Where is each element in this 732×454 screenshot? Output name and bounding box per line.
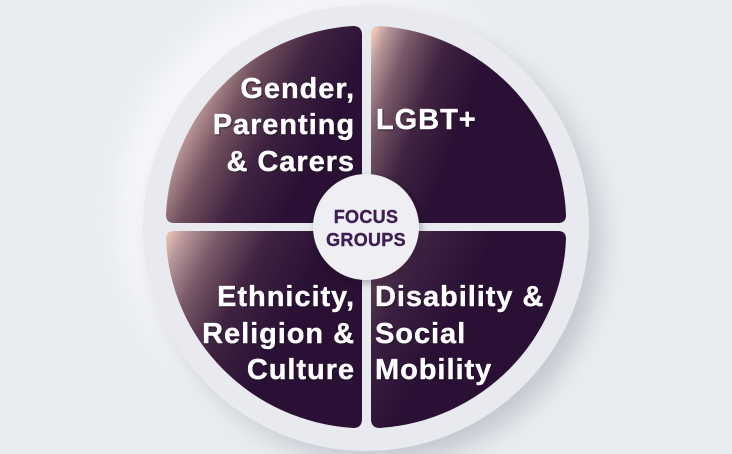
quadrant: Gender, Parenting & Carers (166, 26, 362, 223)
center circle: Focus Groups: GROUPS (326, 230, 406, 250)
label: Ethnicity, Religion & Culture: Culture (247, 354, 355, 386)
label: Gender, Parenting & Carers: Gender, (240, 73, 355, 105)
center circle: Focus Groups (313, 174, 419, 280)
quadrant: Ethnicity, Religion & Culture (166, 231, 362, 428)
label: Disability & Social Mobility: Mobility (375, 354, 492, 386)
label: Disability & Social Mobility: Disability & (375, 281, 544, 313)
quadrant: LGBT+ (371, 26, 566, 223)
quadrant: Disability & Social Mobility (371, 231, 566, 428)
label: Disability & Social Mobility: Social (375, 318, 466, 350)
soft highlight (119, 0, 571, 436)
label: LGBT+: LGBT+ (376, 104, 477, 136)
label: Gender, Parenting & Carers: & Carers (226, 146, 355, 178)
label: Ethnicity, Religion & Culture: Religion & (202, 318, 355, 350)
label: Gender, Parenting & Carers: Parenting (213, 109, 355, 141)
center circle: Focus Groups: FOCUS (334, 207, 398, 227)
label: Ethnicity, Religion & Culture: Ethnicity, (217, 281, 355, 313)
outer disc (143, 5, 589, 451)
